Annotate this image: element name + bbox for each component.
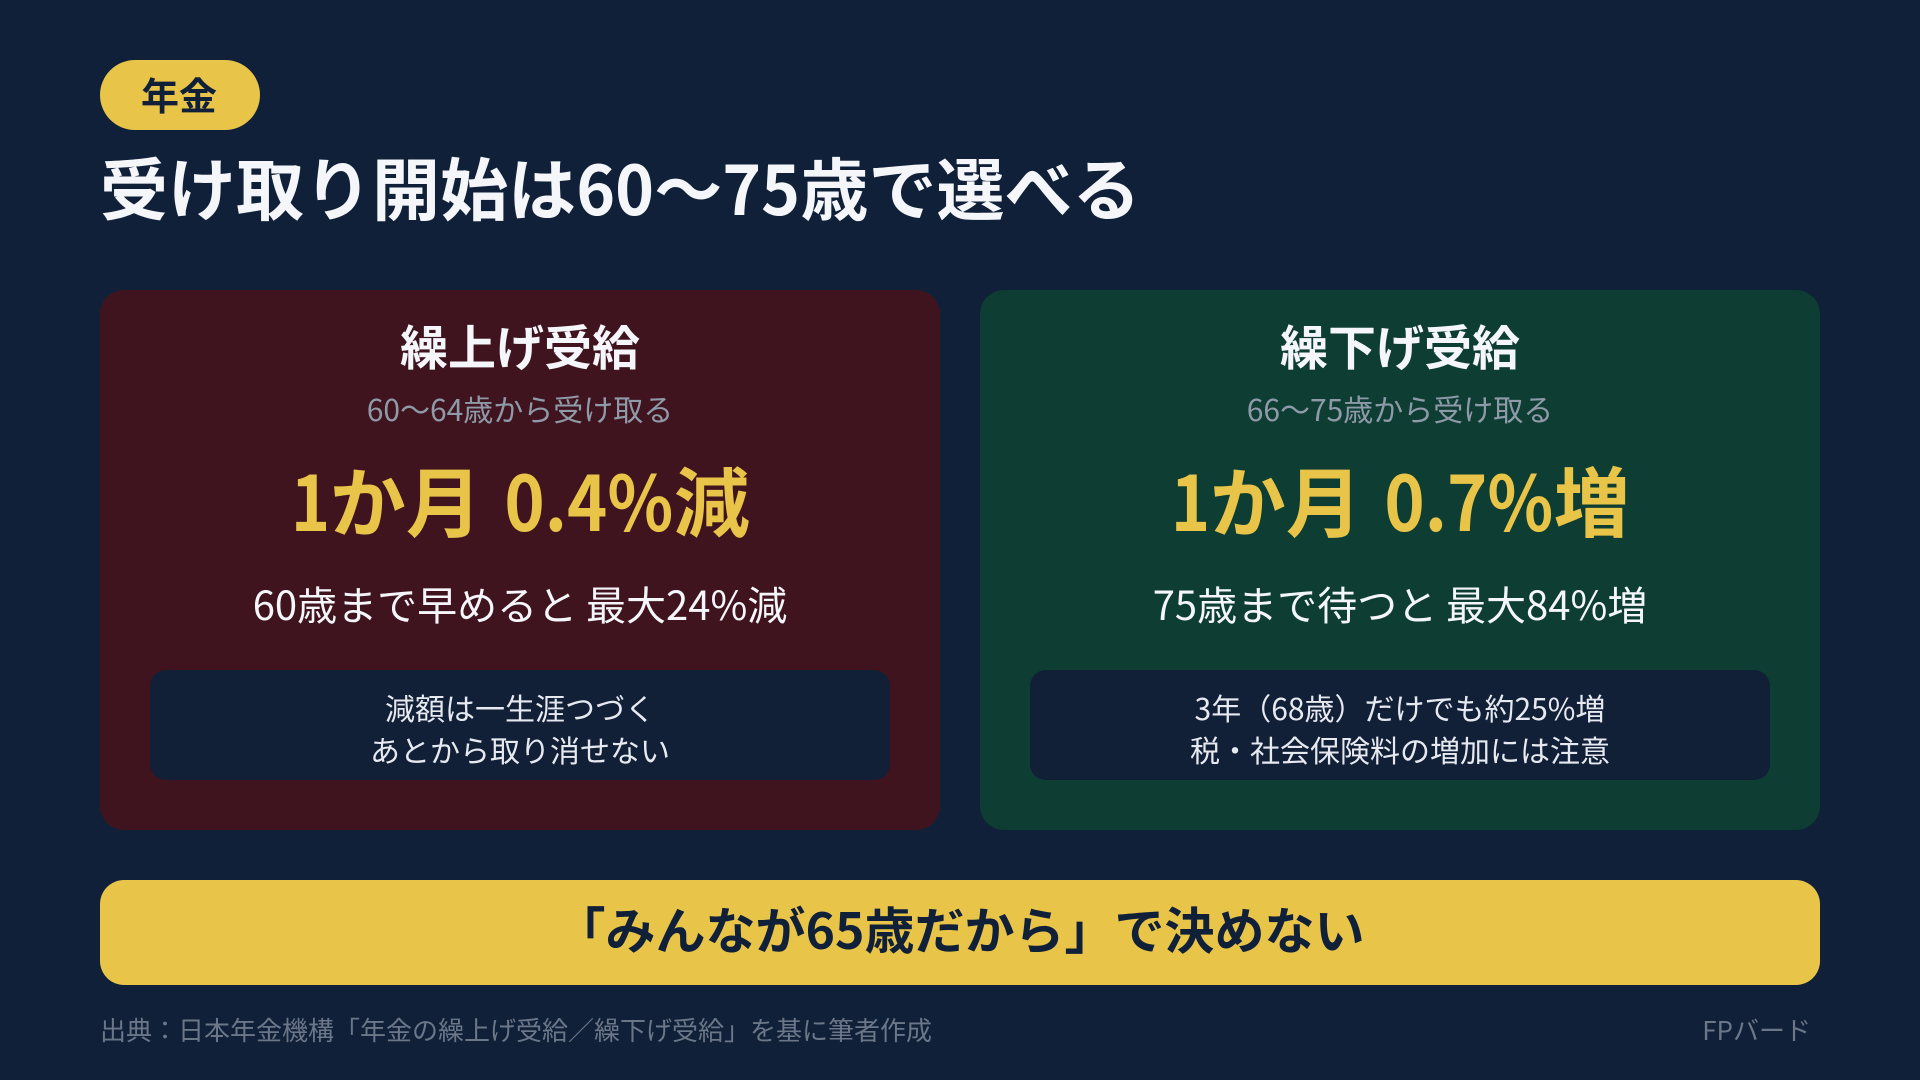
age range: 66～75歳から受け取る <box>1247 386 1553 430</box>
note box: 減額は一生涯つづく <box>385 685 655 729</box>
note box <box>1030 670 1770 780</box>
note box: 税・社会保険料の増加には注意 <box>1190 727 1610 771</box>
source note: 出典：日本年金機構「年金の繰上げ受給／繰下げ受給」を基に筆者作成 <box>100 1011 932 1048</box>
monthly rate: 1 <box>290 443 330 553</box>
brand credit: FPバード <box>1702 1011 1811 1048</box>
monthly rate: か月 増 <box>1210 443 1630 553</box>
note box <box>150 670 890 780</box>
note box: 3年（68歳）だけでも約25%増 <box>1195 685 1605 729</box>
monthly rate: 0.4% <box>505 443 673 553</box>
banner <box>100 880 1820 985</box>
monthly rate: か月 減 <box>330 443 750 553</box>
panel: deferred claiming <box>980 290 1820 830</box>
monthly rate: 1 <box>1170 443 1210 553</box>
title: 受け取り開始は ～ 歳で選べる <box>100 136 1141 235</box>
title: 75 <box>722 136 800 235</box>
maximum effect: 75歳まで待つと 最大84%増 <box>1153 574 1647 632</box>
tag pill <box>100 60 260 130</box>
panel heading: 繰下げ受給 <box>1280 309 1520 379</box>
panel: early claiming <box>100 290 940 830</box>
banner: 「みんなが65歳だから」で決めない <box>556 892 1364 964</box>
maximum effect: 60歳まで早めると 最大24%減 <box>253 574 787 632</box>
age range: 60～64歳から受け取る <box>367 386 673 430</box>
note box: あとから取り消せない <box>370 727 670 771</box>
panel heading: 繰上げ受給 <box>400 309 640 379</box>
title: 60 <box>576 136 654 235</box>
tag pill: 年金 <box>141 66 217 121</box>
monthly rate: 0.7% <box>1385 443 1553 553</box>
